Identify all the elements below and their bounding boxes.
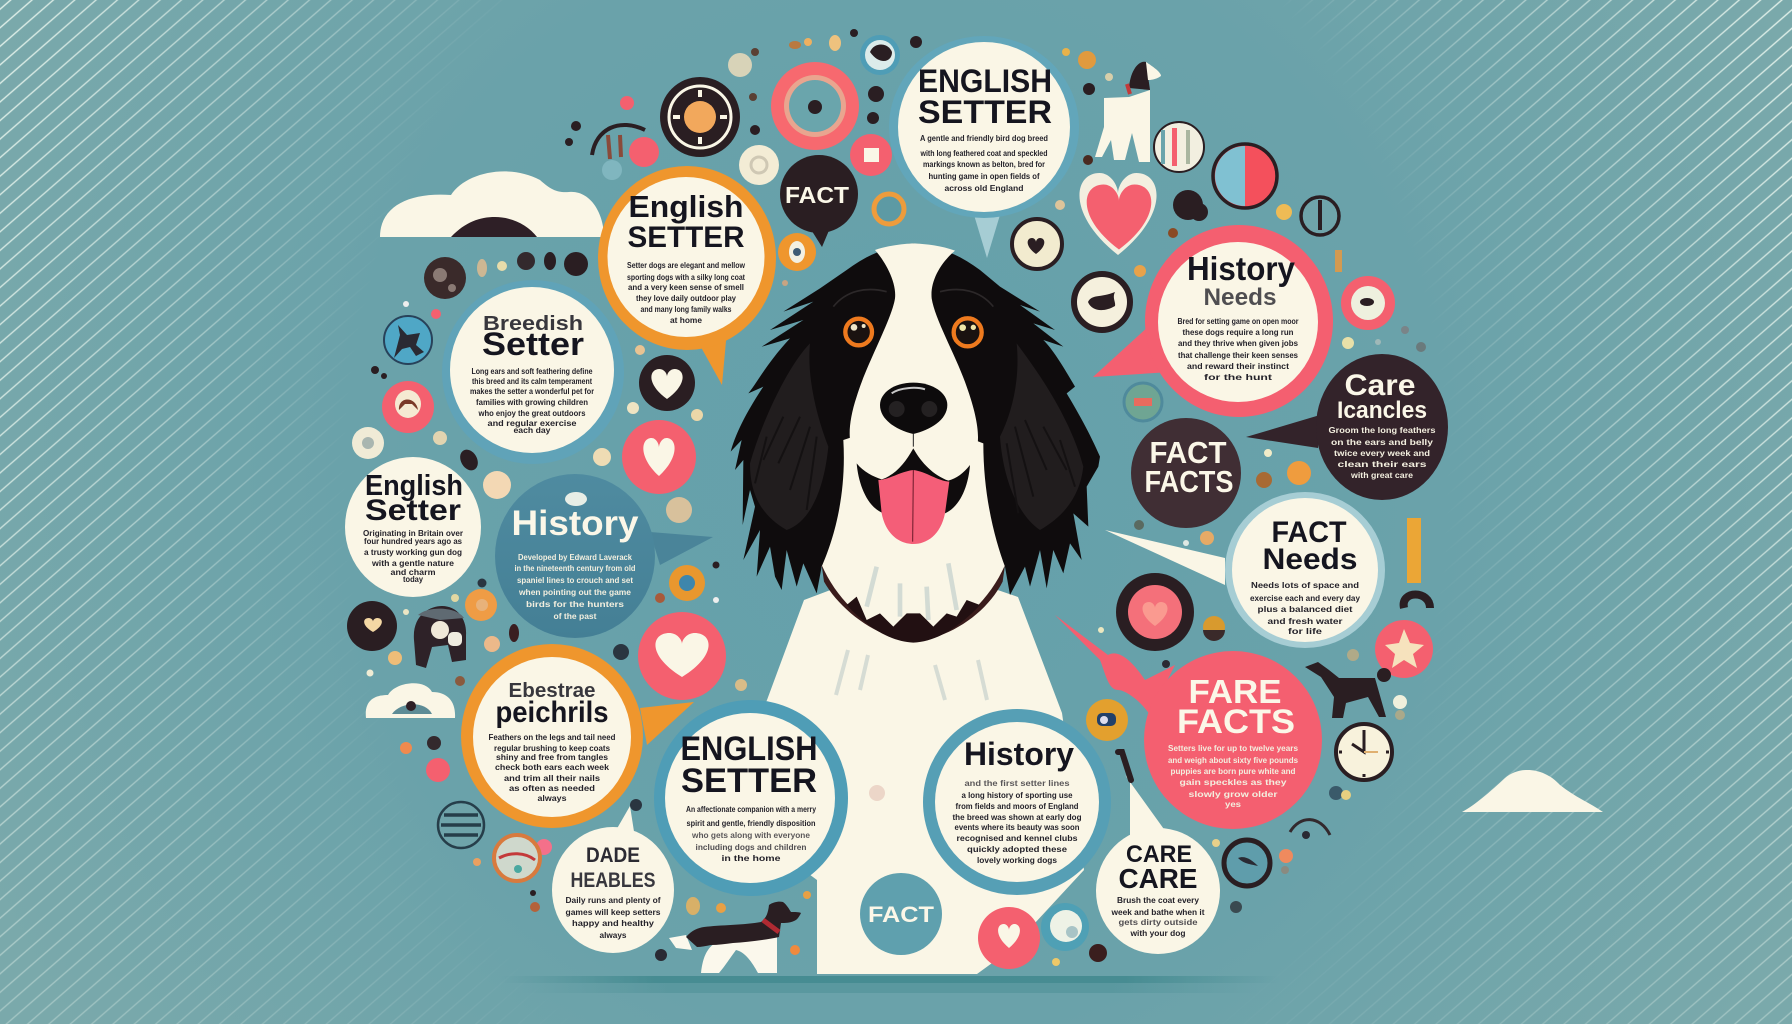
icon: orange ring blue — [669, 565, 705, 601]
text block: clean their ears — [1338, 459, 1427, 469]
icon: cloud — [565, 492, 587, 506]
text block — [363, 528, 464, 584]
text block — [1168, 743, 1298, 809]
text block: they love daily outdoor play — [636, 293, 736, 303]
text block: gain speckles as they — [1180, 777, 1287, 787]
heading: CARE — [1126, 841, 1192, 868]
text block: and they thrive when given jobs — [1178, 338, 1298, 348]
text block: that challenge their keen senses — [1178, 350, 1298, 360]
text block: markings known as belton, bred for — [923, 159, 1046, 169]
heading: History — [1187, 250, 1296, 287]
text block: and trim all their nails — [504, 773, 600, 783]
panel: far-left English Setter bubble — [345, 457, 481, 597]
text block — [514, 552, 636, 621]
icon: sitting dog — [414, 606, 466, 668]
panel: dark blue History bubble — [495, 474, 713, 638]
heading: FACTS — [1144, 464, 1234, 499]
text block — [627, 260, 745, 325]
text block: with your dog — [1130, 928, 1186, 938]
icon: pink eye badge — [1341, 276, 1395, 330]
text block: families with growing children — [476, 397, 588, 407]
icon: cream circle — [739, 145, 779, 185]
decorative cloud: far right — [1462, 770, 1603, 812]
text block: with a gentle nature — [371, 558, 454, 568]
heading: Icancles — [1337, 397, 1427, 424]
text block: the breed was shown at early dog — [952, 812, 1082, 822]
icon: pink star — [1375, 620, 1433, 678]
heading: FACT — [1150, 435, 1227, 470]
panel: Fact Needs bubble — [1105, 492, 1385, 648]
heading: English — [365, 470, 463, 502]
panel: left Setter bubble — [442, 280, 624, 464]
text block: plus a balanced diet — [1258, 604, 1353, 614]
text block: from fields and moors of England — [956, 801, 1078, 811]
heading: Breedish — [483, 313, 583, 335]
text block: including dogs and children — [696, 842, 806, 852]
text block: as often as needed — [509, 783, 595, 793]
text block: a trusty working gun dog — [364, 547, 462, 557]
text block: with great care — [1350, 470, 1413, 480]
text block: a long history of sporting use — [962, 790, 1073, 800]
icon: striped circle lower — [438, 802, 484, 848]
decorative cloud: small — [366, 683, 455, 718]
text block: recognised and kennel clubs — [956, 833, 1078, 843]
text block: four hundred years ago as — [364, 536, 462, 546]
text block: puppies are born pure white and — [1170, 766, 1296, 776]
heading: Setter — [365, 494, 461, 527]
icon: pink heart bottom — [978, 907, 1040, 969]
text block: spaniel lines to crouch and set — [517, 575, 633, 585]
text block: twice every week and — [1334, 448, 1430, 458]
text block — [566, 895, 661, 940]
panel: blue Fact circle — [860, 873, 942, 955]
text block: each day — [514, 425, 551, 435]
ground strip — [500, 976, 1280, 993]
text block: Daily runs and plenty of — [566, 895, 661, 905]
panel: large English Setter bubble — [654, 700, 848, 896]
heading: Needs — [1204, 284, 1276, 311]
text block: Setters live for up to twelve years — [1168, 743, 1298, 753]
icon: striped circle — [1154, 122, 1204, 172]
panel: Care Care bubble — [1096, 752, 1220, 954]
text block: of the past — [554, 611, 597, 621]
icon: mini dog — [669, 902, 801, 973]
heading: Ebestrae — [508, 680, 596, 702]
heading: English — [628, 189, 744, 224]
text block: check both ears each week — [495, 762, 609, 772]
text block: at home — [670, 315, 702, 325]
text block: sporting dogs with a silky long coat — [627, 272, 745, 282]
text block: this breed and its calm temperament — [472, 376, 592, 386]
text block: exercise each and every day — [1250, 593, 1360, 603]
decorative dots: left side — [352, 301, 703, 523]
icon: blue badge — [860, 35, 900, 75]
heading: HEABLES — [570, 869, 656, 892]
text block — [920, 133, 1048, 193]
icon: half blue half red circle — [1213, 144, 1277, 208]
text block: with long feathered coat and speckled — [920, 148, 1048, 158]
text block: games will keep setters — [566, 907, 661, 917]
text block: makes the setter a wonderful pet for — [470, 386, 595, 396]
icon: dark ring teal — [1224, 840, 1270, 886]
text block: and reward their instinct — [1187, 361, 1289, 371]
panel: orange bubble lower left — [461, 644, 694, 828]
text block: and the first setter lines — [964, 778, 1070, 788]
heading: FACT — [868, 902, 935, 927]
panel: top English Setter bubble — [889, 36, 1079, 258]
icon: pink puzzle — [850, 134, 892, 176]
icon: big heart — [1079, 173, 1157, 255]
text block: for the hunt — [1204, 372, 1272, 382]
text block: Setter dogs are elegant and mellow — [627, 260, 745, 270]
heading: Needs — [1262, 543, 1358, 576]
heading — [482, 313, 584, 362]
text block: Groom the long feathers — [1328, 425, 1436, 435]
heading — [1177, 673, 1295, 741]
text block: who gets along with everyone — [691, 830, 810, 840]
text block: and regular exercise — [488, 418, 577, 428]
text block: Bred for setting game on open moor — [1178, 316, 1299, 326]
heading: Care — [1344, 369, 1416, 402]
icon: blue cream badge — [1041, 903, 1089, 951]
text block — [470, 366, 595, 435]
text block: yes — [1225, 799, 1241, 809]
text block: and many long family walks — [640, 304, 732, 314]
heading — [628, 189, 745, 254]
text block: Feathers on the legs and tail need — [488, 732, 616, 742]
heading: DADE — [586, 844, 640, 867]
icon: pink dog badge — [382, 381, 434, 433]
text block: gets dirty outside — [1118, 917, 1198, 927]
icon: dark heart — [639, 355, 695, 411]
panel: orange English Setter bubble — [598, 166, 776, 385]
icon: dark blob — [1173, 190, 1208, 221]
heading: SETTER — [628, 221, 745, 254]
text block: regular brushing to keep coats — [494, 743, 610, 753]
icon: orange camera — [1086, 699, 1128, 741]
text block: these dogs require a long run — [1182, 327, 1294, 337]
icon: dark heart left — [347, 601, 397, 651]
text block — [1250, 580, 1360, 636]
heading: History — [964, 736, 1074, 772]
text block: A gentle and friendly bird dog breed — [920, 133, 1048, 143]
icon: dial — [660, 77, 740, 157]
heading: ENGLISH — [918, 63, 1052, 99]
text block: shiny and free from tangles — [496, 752, 608, 762]
icon: dark ring with paw — [1074, 274, 1130, 330]
decorative dots: top arc — [565, 29, 922, 286]
text block: spirit and gentle, friendly disposition — [686, 818, 816, 828]
panel: blue History bubble lower right — [923, 709, 1111, 895]
heading — [1337, 369, 1427, 424]
icon: pink heart lower — [638, 612, 726, 700]
heading: peichrils — [496, 696, 608, 729]
text block: across old England — [944, 183, 1024, 193]
text block: for life — [1288, 626, 1322, 636]
text block — [1111, 895, 1205, 938]
text block: Brush the coat every — [1117, 895, 1199, 905]
text block: Needs lots of space and — [1251, 580, 1359, 590]
heading: ENGLISH — [680, 730, 818, 768]
panel: Dade Heables bubble — [552, 799, 674, 953]
icon: orange ring eye — [494, 835, 552, 881]
text block: today — [403, 574, 423, 584]
panel: dark Fact Facts circle — [1131, 418, 1241, 528]
icon: dog silhouette — [1305, 662, 1391, 718]
icon: pink target ring — [771, 62, 859, 150]
icon: cream heart button — [1012, 219, 1062, 269]
text block: who enjoy the great outdoors — [478, 408, 586, 418]
heading: FACTS — [1177, 703, 1295, 741]
panel: pink Fare Facts bubble — [1055, 615, 1322, 829]
decorative dots: left row — [424, 252, 588, 299]
heading — [1118, 841, 1198, 894]
heading: FACT — [1272, 516, 1346, 549]
heading — [1262, 516, 1358, 576]
heading — [680, 730, 818, 800]
text block: events where its beauty was soon — [954, 822, 1080, 832]
text block: in the nineteenth century from old — [514, 563, 636, 573]
heading: SETTER — [681, 762, 817, 800]
icon: orange eye — [778, 233, 816, 271]
text block: An affectionate companion with a merry — [686, 804, 816, 814]
text block — [686, 804, 816, 863]
text block — [1178, 316, 1299, 382]
decorative dots: lower left — [366, 562, 811, 961]
heading — [570, 844, 656, 892]
heading: FARE — [1188, 673, 1282, 710]
heading: History — [512, 504, 639, 543]
icon: pink heart — [622, 420, 696, 494]
heading: CARE — [1118, 863, 1198, 894]
text block: quickly adopted these — [967, 844, 1067, 854]
text block: on the ears and belly — [1331, 437, 1433, 447]
text block — [1328, 425, 1436, 480]
heading — [918, 63, 1052, 130]
text block: when pointing out the game — [518, 587, 631, 597]
panel: dark Care bubble — [1246, 354, 1448, 500]
panel: small dark Fact bubble — [780, 155, 858, 247]
text block: and weigh about sixty five pounds — [1168, 755, 1298, 765]
dog illustration — [731, 243, 1100, 974]
icon: white standing dog — [1095, 62, 1161, 162]
text block: always — [600, 930, 627, 940]
decorative dots: lower right — [1052, 518, 1430, 966]
text block: and a very keen sense of smell — [628, 282, 744, 292]
icon: dark ring pink heart — [1116, 573, 1194, 651]
text block: birds for the hunters — [526, 599, 624, 609]
heading — [1144, 435, 1234, 499]
icon: dark ring — [1301, 197, 1339, 235]
icon: hanging arc — [592, 125, 659, 180]
text block: lovely working dogs — [977, 855, 1057, 865]
text block: slowly grow older — [1188, 789, 1278, 799]
heading: SETTER — [918, 94, 1052, 130]
icon: clock — [1336, 724, 1392, 780]
heading — [365, 470, 463, 527]
text block: in the home — [722, 853, 781, 863]
text block: week and bathe when it — [1111, 907, 1205, 917]
text block: happy and healthy — [572, 918, 654, 928]
heading — [496, 680, 608, 729]
text block — [488, 732, 616, 803]
text block: and fresh water — [1268, 616, 1343, 626]
text block — [952, 778, 1082, 865]
text block: Originating in Britain over — [363, 528, 464, 538]
heading: Setter — [482, 326, 584, 362]
text block: Long ears and soft feathering define — [472, 366, 593, 376]
text block: always — [538, 793, 567, 803]
icon: colourful badge — [1124, 383, 1162, 421]
icon: blue dog badge — [384, 316, 432, 364]
heading: FACT — [785, 182, 849, 208]
text block: hunting game in open fields of — [928, 171, 1040, 181]
text block: Developed by Edward Laverack — [518, 552, 632, 562]
decorative dots: right side — [1055, 48, 1426, 530]
heading — [1187, 250, 1296, 311]
decorative cloud: large — [380, 171, 604, 237]
icon: orange ring — [874, 194, 904, 224]
text block: and charm — [390, 567, 436, 577]
panel: pink-ring History bubble — [1093, 225, 1333, 417]
